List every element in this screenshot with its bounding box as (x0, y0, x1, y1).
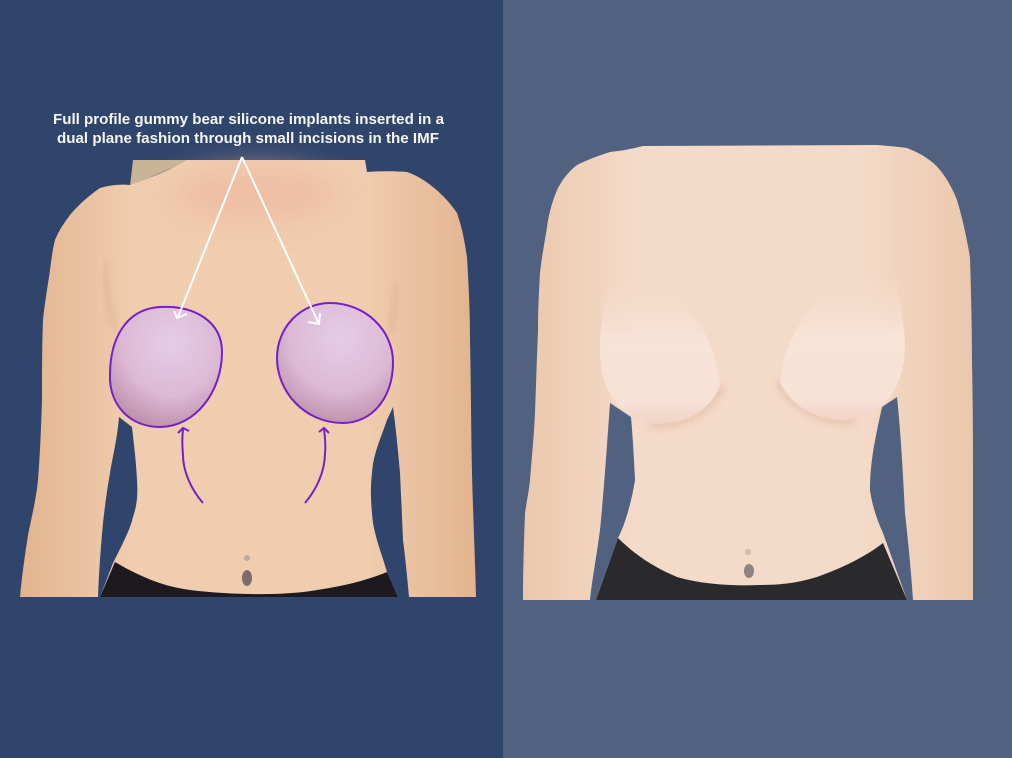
panel: before (left background) (0, 0, 503, 758)
implant: left side outline (110, 307, 222, 427)
right augmented contour (780, 268, 905, 420)
caption text: Full profile gummy bear silicone implants inserted in a (53, 111, 445, 128)
caption text: dual plane fashion through small incisions in the IMF (57, 130, 439, 147)
chest tone (170, 167, 340, 223)
arrow: incision left (178, 428, 203, 503)
implant: right side outline (277, 303, 393, 423)
arm crease right (390, 282, 397, 332)
navel jewellery (242, 555, 252, 586)
panel: after (right background) (503, 0, 1012, 758)
waistband (100, 562, 398, 597)
arrow: caption to right implant (242, 157, 320, 324)
arm crease left (105, 262, 116, 330)
arrow: incision right (305, 428, 329, 503)
figure: after torso (523, 145, 973, 600)
left contour shadow (650, 385, 722, 425)
torso and arms silhouette (20, 160, 476, 597)
waistband (596, 538, 907, 600)
right contour shadow (778, 382, 855, 421)
left augmented contour (600, 270, 720, 424)
caption text (53, 111, 445, 147)
arrow: caption to left implant (174, 157, 242, 318)
figure: before torso (20, 160, 476, 597)
navel jewellery (744, 549, 754, 578)
hair behind shoulders (130, 160, 367, 186)
torso and arms silhouette (523, 145, 973, 600)
